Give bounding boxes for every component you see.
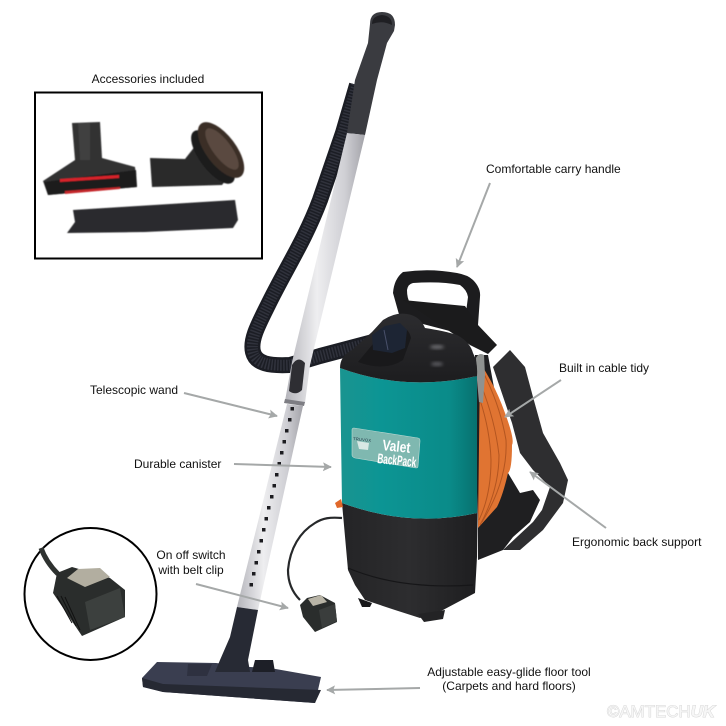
label: carry handle: Comfortable carry handle xyxy=(486,162,621,176)
accessories heading: Accessories included xyxy=(92,72,204,86)
label: on off switch: with belt clip xyxy=(157,563,224,577)
panel: accessories included xyxy=(35,92,262,258)
arrow: telescopic wand xyxy=(184,393,277,416)
label: back support: Ergonomic back support xyxy=(572,535,702,549)
label: durable canister: Durable canister xyxy=(134,457,221,471)
carry handle xyxy=(393,270,480,335)
floor tool xyxy=(142,607,321,703)
label: floor tool: Adjustable easy-glide floor tool xyxy=(427,665,591,679)
telescopic wand upper xyxy=(285,133,365,403)
accessory: crevice tool xyxy=(67,200,238,233)
label: floor tool: (Carpets and hard floors) xyxy=(442,679,576,693)
label: telescopic wand: Telescopic wand xyxy=(90,383,178,397)
wand top grip xyxy=(347,12,395,135)
orange cable tidy xyxy=(476,354,513,528)
canister bottom black xyxy=(342,503,477,622)
canister teal body xyxy=(340,368,477,519)
arrow: back support xyxy=(530,472,606,528)
wand collar and clip xyxy=(284,359,305,406)
arrow: cable tidy xyxy=(505,380,561,417)
arrow: on off switch xyxy=(196,584,288,608)
product label valet backpack: Valet xyxy=(382,437,411,457)
on off switch small xyxy=(300,595,337,632)
label: cable tidy: Built in cable tidy xyxy=(559,361,649,375)
accessory: dusting brush xyxy=(150,115,253,190)
canister top dome xyxy=(340,314,477,382)
telescopic wand lower with holes xyxy=(237,404,303,610)
hose xyxy=(252,85,373,365)
orange cord plug xyxy=(335,499,343,508)
accessory: upholstery tool xyxy=(43,122,137,195)
inset: on off switch closeup xyxy=(24,528,156,660)
watermark: ©AMTECHUK xyxy=(607,702,717,721)
hose connector xyxy=(372,323,407,353)
product label valet backpack: BackPack xyxy=(377,450,417,470)
arrow: carry handle xyxy=(457,183,490,267)
switch cord xyxy=(288,518,342,600)
product label valet backpack xyxy=(352,428,420,470)
arrow: durable canister xyxy=(234,464,331,467)
product label valet backpack: TRUVOX xyxy=(353,436,372,443)
label: on off switch: On off switch xyxy=(156,548,226,562)
arrow: floor tool xyxy=(327,688,420,690)
backpack harness xyxy=(403,300,568,560)
